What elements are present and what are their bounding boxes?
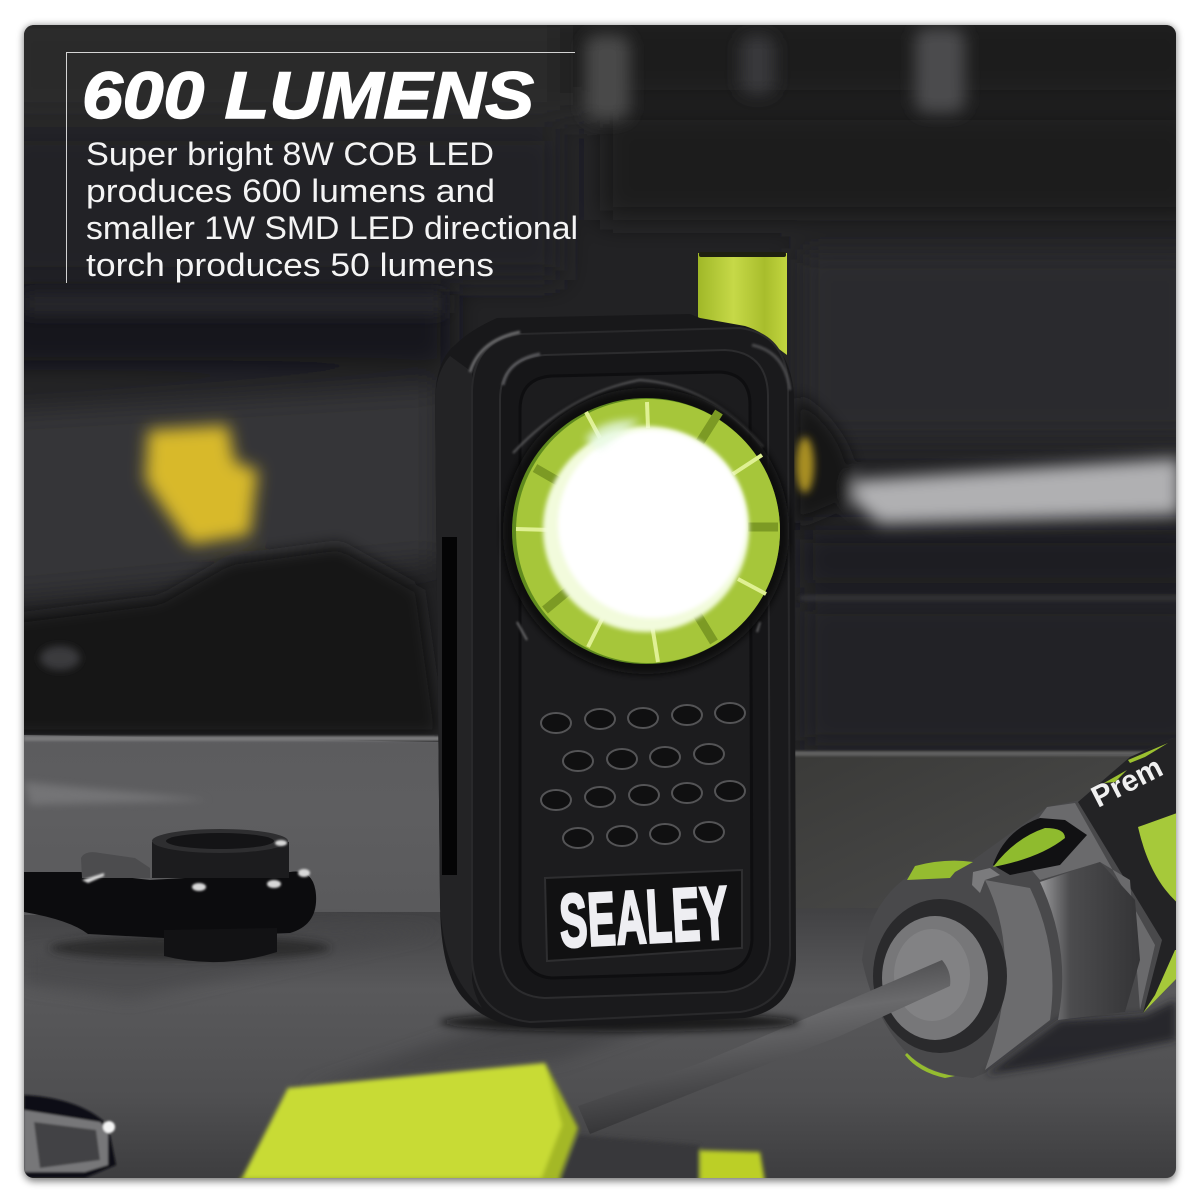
yellow-green ruler foreground [240, 1063, 765, 1182]
LED glow [543, 426, 749, 632]
SEALEY logo plate: SEALEY [557, 870, 730, 963]
icon: ratchet spanner [24, 829, 330, 962]
grip dots [541, 703, 745, 848]
screwdriver [578, 738, 1180, 1134]
torch pen light tube [698, 252, 787, 355]
torch [435, 252, 800, 1032]
black teardrop and lime inset [993, 818, 1087, 875]
grey collar band [1032, 803, 1155, 1010]
torch side strip [435, 356, 482, 1008]
torch front inner panel [500, 350, 770, 998]
handle shadow [985, 1000, 1176, 1075]
screwdriver handle [862, 738, 1180, 1078]
heading: 600 LUMENS [82, 58, 534, 132]
heading block rule lines [66, 52, 575, 283]
description text: Super bright 8W COB LED [86, 136, 494, 172]
handle brand text: Prem [1086, 751, 1168, 814]
description text: produces 600 lumens and [86, 173, 495, 209]
description text: smaller 1W SMD LED directional [86, 210, 578, 246]
description text [86, 136, 578, 283]
torch outer ridge [472, 328, 790, 1022]
concave grip [1040, 862, 1140, 1020]
background workshop [0, 10, 1200, 755]
front bulb [985, 880, 1052, 1070]
blurred light strip [830, 458, 1180, 524]
workbench surface [24, 735, 1176, 1178]
lime grip panels [1138, 813, 1176, 902]
spanner shadow [50, 936, 330, 960]
torch corner highlights [470, 332, 790, 640]
torch body shadow [440, 1012, 800, 1032]
LED bezel [503, 388, 789, 674]
blurred dark tools [0, 545, 440, 735]
torch body [435, 314, 796, 1028]
screwdriver shaft [578, 960, 950, 1134]
icon: socket bottom left [24, 1095, 116, 1178]
blurred yellow object [145, 425, 258, 545]
dark band with text [1078, 738, 1180, 1013]
description text: torch produces 50 lumens [86, 247, 494, 283]
